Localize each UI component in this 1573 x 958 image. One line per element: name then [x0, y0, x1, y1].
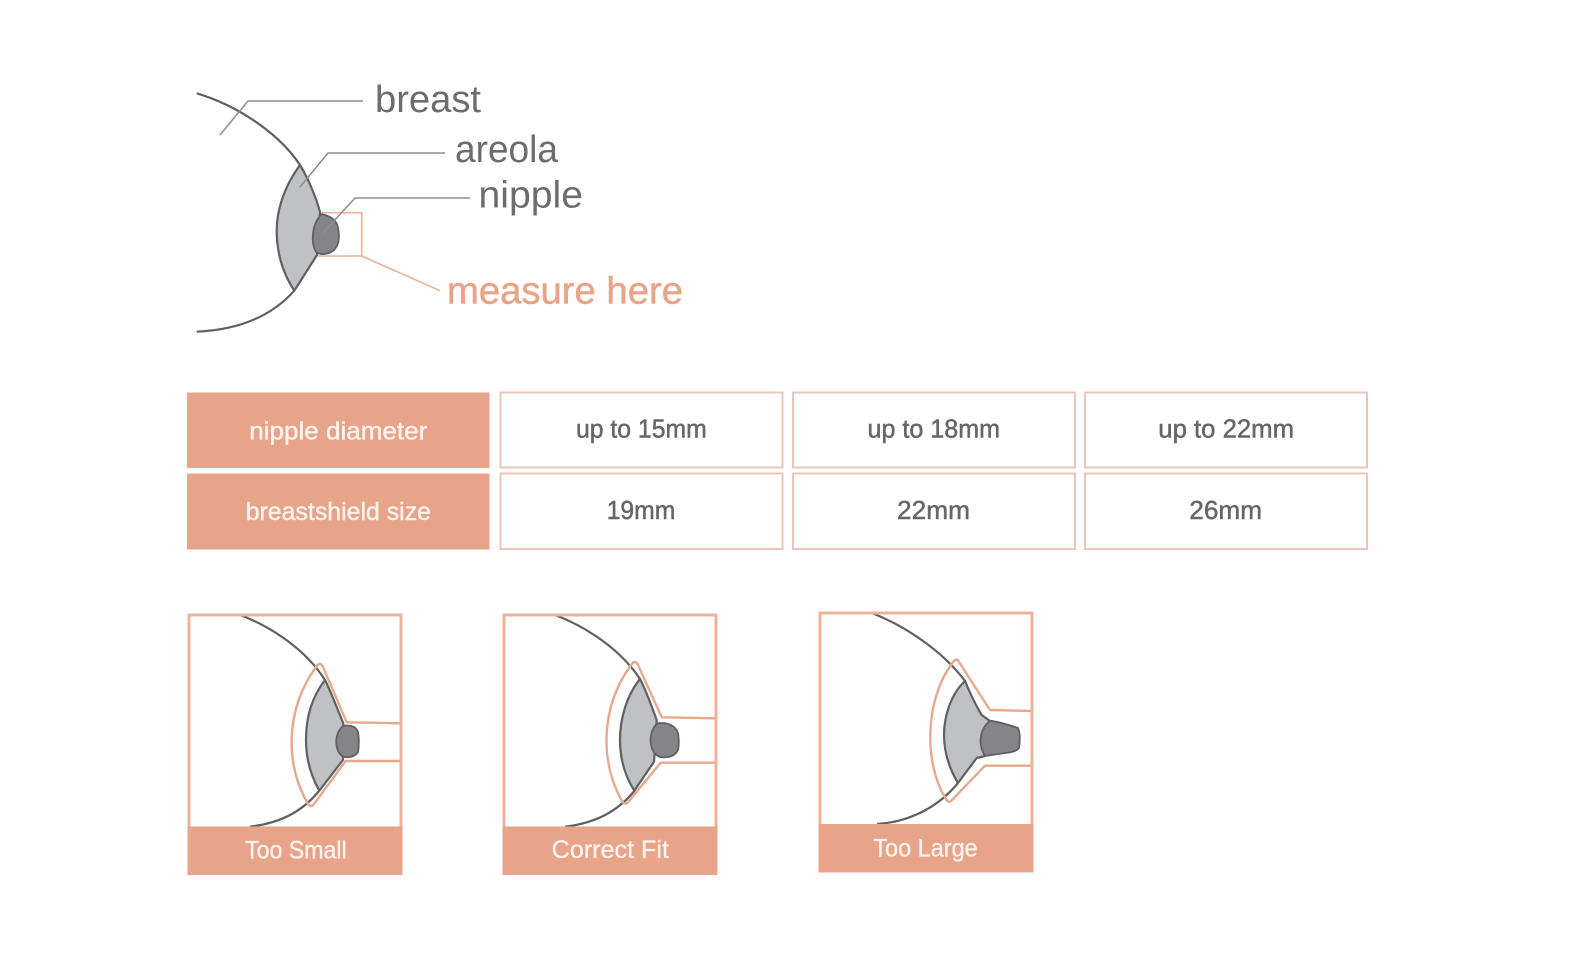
- breast outline: [197, 93, 300, 332]
- cell: up to 22mm: up to 22mm: [1158, 413, 1294, 443]
- caption bar: [188, 826, 402, 875]
- frame: [820, 613, 1032, 871]
- breast outline: [555, 615, 640, 827]
- nipple: [651, 723, 679, 757]
- caption bar: [502, 826, 718, 875]
- cell: 22mm: [793, 474, 1075, 549]
- areola: [306, 680, 343, 791]
- cell: up to 15mm: [500, 392, 782, 468]
- sizing table: [187, 392, 1367, 550]
- breast outline: [240, 615, 325, 827]
- row header: breastshield size: breastshield size: [246, 498, 431, 526]
- caption: Correct Fit: Correct Fit: [552, 836, 669, 864]
- row header: nipple diameter: nipple diameter: [249, 417, 427, 445]
- panel: too large: [818, 613, 1034, 872]
- nipple: [313, 214, 339, 254]
- leader line: areola: [300, 153, 445, 187]
- areola: [620, 679, 657, 791]
- nipple: [981, 721, 1020, 756]
- cell: up to 18mm: up to 18mm: [868, 413, 1000, 443]
- areola: [944, 681, 990, 783]
- cell: up to 22mm: [1085, 392, 1367, 468]
- breastshield outline: [292, 664, 402, 806]
- caption: Too Small: Too Small: [245, 836, 347, 864]
- cell: 22mm: 22mm: [897, 495, 970, 525]
- row header: nipple diameter: [187, 392, 490, 468]
- leader line: breast: [220, 101, 363, 135]
- nipple: [336, 726, 359, 757]
- cell: 19mm: 19mm: [607, 495, 675, 525]
- breast outline: [872, 613, 965, 824]
- caption bar: [818, 824, 1034, 872]
- anatomy diagram: [197, 79, 683, 332]
- label: nipple: nipple: [478, 175, 583, 217]
- label: areola: areola: [455, 129, 559, 171]
- areola: [277, 165, 320, 291]
- cell: up to 18mm: [793, 392, 1075, 468]
- leader line: nipple: [323, 198, 470, 233]
- breastshield outline: [930, 660, 1032, 802]
- frame: [189, 615, 401, 873]
- cell: 26mm: [1085, 474, 1367, 549]
- panel: too small: [188, 615, 402, 875]
- measure box: [318, 213, 440, 291]
- caption: Too Large: Too Large: [873, 835, 978, 863]
- cell: 26mm: 26mm: [1189, 495, 1262, 525]
- cell: up to 15mm: up to 15mm: [576, 413, 707, 443]
- breastshield outline: [606, 662, 715, 804]
- label: measure here: measure here: [447, 270, 683, 312]
- label: breast: breast: [375, 79, 481, 121]
- row header: breastshield size: [187, 474, 490, 550]
- panel: correct fit: [502, 615, 718, 875]
- frame: [504, 615, 716, 873]
- cell: 19mm: [500, 474, 782, 549]
